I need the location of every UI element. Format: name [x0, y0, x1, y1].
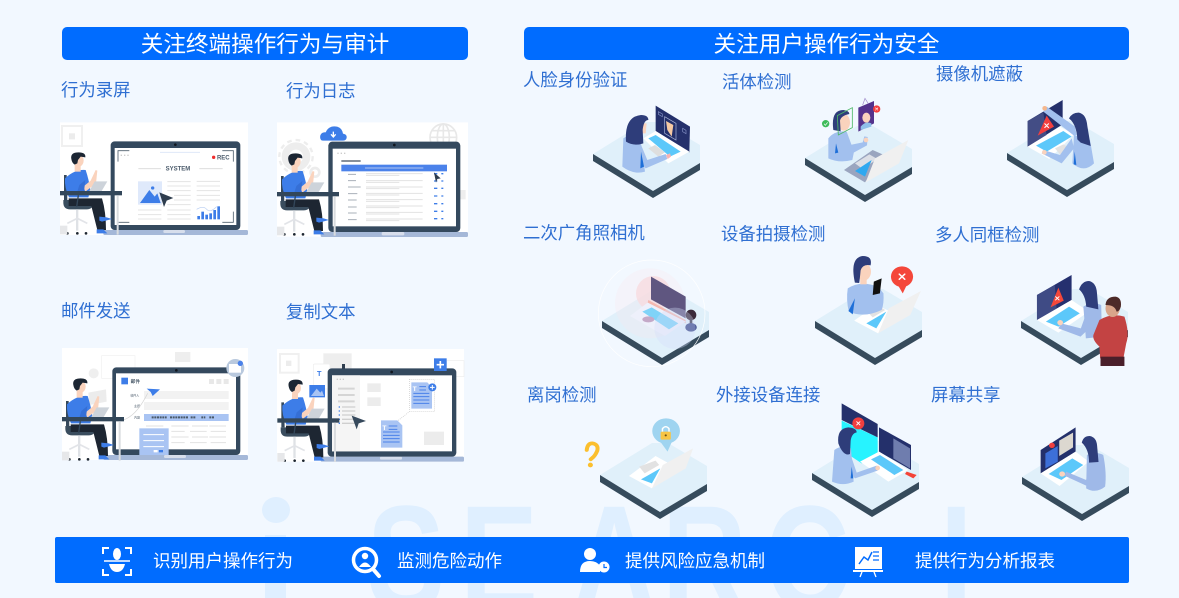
- icon: question mark: [587, 443, 598, 467]
- label: liveness detection: 活体检测: [722, 72, 792, 92]
- man at desk: [277, 153, 339, 236]
- label: camera cover: 摄像机遮蔽: [936, 64, 1023, 84]
- label: screen sharing: 屏幕共享: [931, 385, 1001, 405]
- label: multi person detection: 多人同框检测: [935, 225, 1039, 245]
- label: copy text: 复制文本: [286, 302, 356, 322]
- icon: globe: [430, 124, 457, 151]
- label: leaving post detection: 离岗检测: [527, 385, 597, 405]
- illustration: multiple people in frame: [1021, 275, 1128, 366]
- illustration: face verification: [593, 106, 700, 198]
- laptop: SYSTEM: [166, 167, 190, 173]
- illustration: device photo detection: [815, 256, 922, 365]
- laptop with mail form: 收件人: [130, 393, 139, 398]
- illustration: camera cover: [1007, 100, 1114, 197]
- icon: face scan: [103, 548, 131, 575]
- laptop with mail form: 邮件: [131, 378, 140, 385]
- icon: magnifier: [354, 548, 379, 576]
- icon: floating picture: [309, 385, 325, 397]
- panel: behaviour log illustration: [277, 122, 468, 237]
- man at desk: [60, 152, 122, 235]
- heading: terminal behaviour: 关注终端操作行为与审计: [141, 32, 389, 57]
- icon: cloud download: [320, 126, 347, 141]
- man at desk: [277, 380, 339, 462]
- bottom bar: [55, 537, 1129, 583]
- icon: report board: [853, 547, 883, 577]
- label: email sending: 邮件发送: [61, 301, 131, 321]
- laptop with document copy: T: [382, 425, 386, 432]
- laptop with mail form: 内容: [134, 415, 140, 420]
- icon: user with clock: [580, 548, 610, 572]
- laptop with document copy: [321, 364, 464, 462]
- text: provide analysis reports: 提供行为分析报表: [915, 551, 1055, 571]
- laptop with mail form: [103, 367, 248, 460]
- laptop with log table: [321, 142, 468, 237]
- panel: copy text illustration: [277, 349, 464, 462]
- panel: screen recording illustration: [60, 122, 248, 235]
- panel: email sending illustration: [62, 348, 248, 461]
- icon: mail badge: [226, 359, 244, 377]
- laptop: [103, 141, 248, 235]
- text: identify user actions: 识别用户操作行为: [153, 551, 293, 571]
- text: provide risk response: 提供风险应急机制: [625, 551, 765, 571]
- label: screen recording: 行为录屏: [61, 80, 131, 100]
- illustration: screen sharing: [1022, 427, 1129, 521]
- laptop with document copy: T: [413, 386, 417, 393]
- heading: user behaviour: 关注用户操作行为安全: [714, 32, 940, 57]
- illustration: leaving post detection: [587, 418, 707, 519]
- illustration: external device connection: [812, 403, 919, 517]
- heading: user behaviour: [524, 27, 1129, 60]
- label: behaviour log: 行为日志: [286, 81, 356, 101]
- panel: copy text illustration: T: [317, 369, 322, 378]
- heading: terminal behaviour: [62, 27, 468, 60]
- illustration: liveness detection: [805, 98, 912, 202]
- label: external device connection: 外接设备连接: [716, 385, 820, 405]
- watermark: [367, 490, 973, 598]
- man at desk: [62, 378, 124, 461]
- laptop with mail form: 主题: [134, 403, 140, 408]
- icon: lock bubble: [652, 418, 680, 452]
- text: monitor risky actions: 监测危险动作: [397, 551, 502, 571]
- icon: plus badge: [434, 358, 447, 371]
- watermark dot: [262, 497, 290, 598]
- label: face verification: 人脸身份验证: [523, 70, 627, 90]
- illustration: wide-angle camera: [598, 260, 709, 367]
- laptop: REC: [217, 156, 230, 162]
- label: device photo detection: 设备拍摄检测: [721, 224, 825, 244]
- label: secondary wide-angle camera: 二次广角照相机: [523, 223, 645, 243]
